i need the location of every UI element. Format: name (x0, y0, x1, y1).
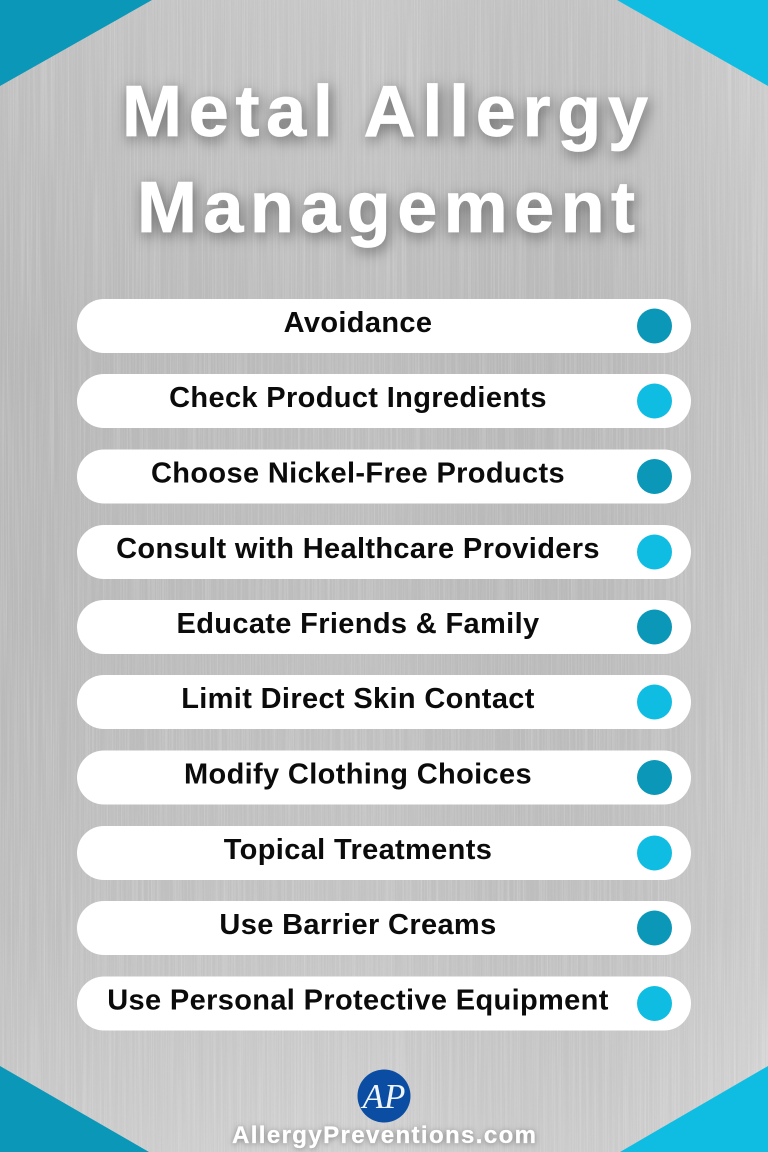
list item: Avoidance (77, 299, 691, 353)
list item: Topical Treatments (77, 826, 691, 880)
list item: Consult with Healthcare Providers (77, 525, 691, 579)
corner accent: top right (617, 0, 768, 86)
list item: Topical Treatments: Topical Treatments (224, 834, 492, 866)
list item: Limit Direct Skin Contact: Limit Direct Skin Contact (181, 683, 535, 715)
list item: Check Product Ingredients (77, 374, 691, 428)
list item: Consult with Healthcare Providers: Consult with Healthcare Providers (116, 533, 600, 565)
list item: Limit Direct Skin Contact (77, 675, 691, 729)
list of management strategies (77, 299, 691, 1030)
list item: Use Personal Protective Equipment: Use Personal Protective Equipment (107, 984, 609, 1016)
list item: Use Personal Protective Equipment (77, 976, 691, 1030)
footer website: AllergyPreventions.com (232, 1122, 536, 1149)
list item: Modify Clothing Choices (77, 750, 691, 804)
title (122, 72, 648, 248)
list item: Choose Nickel-Free Products: Choose Nickel-Free Products (151, 458, 565, 490)
list item: Modify Clothing Choices: Modify Clothing Choices (184, 758, 532, 790)
list item: Choose Nickel-Free Products (77, 450, 691, 504)
list item: Educate Friends & Family (77, 600, 691, 654)
corner accent: bottom right (620, 1066, 768, 1152)
corner accent: top left (0, 0, 152, 86)
corner accent: bottom left (0, 1066, 149, 1152)
list item: Avoidance: Avoidance (284, 307, 432, 339)
list item: Use Barrier Creams: Use Barrier Creams (219, 909, 497, 941)
title: Management (137, 168, 635, 248)
list item: Use Barrier Creams (77, 901, 691, 955)
logo: AP monogram (358, 1070, 410, 1122)
logo: AP monogram: AP (361, 1077, 405, 1116)
title: Metal Allergy (122, 72, 648, 152)
list item: Educate Friends & Family: Educate Friends & Family (177, 608, 539, 640)
list item: Check Product Ingredients: Check Product Ingredients (169, 382, 547, 414)
